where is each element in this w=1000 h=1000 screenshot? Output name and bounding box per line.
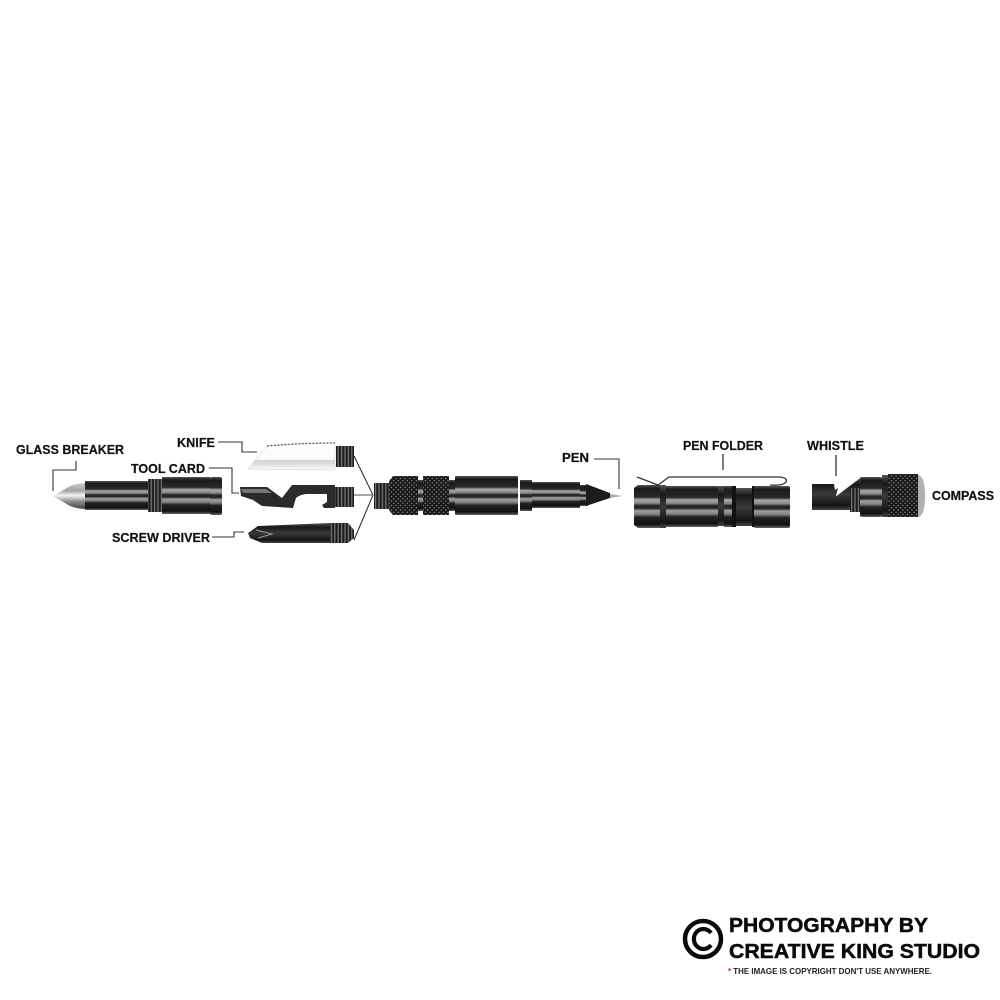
card highlight xyxy=(241,489,272,493)
threaded end xyxy=(336,446,354,467)
knurled grip xyxy=(888,474,918,517)
barrel xyxy=(634,485,660,528)
knurled grip 2 xyxy=(423,476,449,515)
barrel xyxy=(85,481,149,510)
label: screw driver: SCREW DRIVER xyxy=(112,531,210,545)
pocket clip xyxy=(637,477,786,485)
knurled grip 1 xyxy=(389,476,418,515)
label: pen xyxy=(562,451,619,489)
label: whistle xyxy=(807,439,864,476)
end collar xyxy=(210,477,222,515)
part: knife xyxy=(248,443,354,470)
label: glass breaker xyxy=(16,443,124,491)
label: compass: COMPASS xyxy=(932,489,994,503)
threaded neck xyxy=(850,488,860,512)
part: pen folder xyxy=(634,477,790,528)
label: whistle: WHISTLE xyxy=(807,439,864,453)
collar 1 xyxy=(418,480,423,511)
part: glass breaker head xyxy=(53,477,222,515)
connector lines to pen body xyxy=(354,456,373,540)
driver bit xyxy=(248,523,330,543)
whistle tube xyxy=(812,478,860,510)
blade xyxy=(248,443,335,470)
label: glass breaker: GLASS BREAKER xyxy=(16,443,124,457)
card body xyxy=(240,485,335,508)
collar 2 xyxy=(449,480,455,511)
label: knife xyxy=(177,436,257,452)
copyright notice: * THE IMAGE IS COPYRIGHT DON'T USE ANYWHERE. xyxy=(728,966,932,976)
label: tool card xyxy=(131,462,239,493)
pen tip xyxy=(610,494,622,498)
part: main pen body xyxy=(374,476,622,515)
label: tool card: TOOL CARD xyxy=(131,462,205,476)
metal cone tip xyxy=(53,483,86,509)
threaded end xyxy=(330,523,354,543)
label: pen folder xyxy=(683,439,763,470)
credit line 1: PHOTOGRAPHY BY xyxy=(729,914,928,937)
step collar xyxy=(520,480,532,511)
part: screw driver xyxy=(248,523,354,543)
front barrel xyxy=(532,482,580,508)
compass face xyxy=(918,475,925,517)
main barrel xyxy=(455,476,518,515)
grooved neck xyxy=(148,479,162,512)
whistle notch xyxy=(836,477,861,496)
label: pen folder: PEN FOLDER xyxy=(683,439,763,453)
serrated spine xyxy=(267,443,335,446)
sleeve xyxy=(162,477,210,514)
threaded end xyxy=(335,487,354,507)
label: knife: KNIFE xyxy=(177,436,215,450)
thread xyxy=(374,483,389,509)
copyright badge xyxy=(685,914,980,976)
label: pen: PEN xyxy=(562,451,589,465)
bit cross highlight xyxy=(256,530,272,538)
part: whistle and compass cap xyxy=(812,474,925,517)
icon: copyright circle xyxy=(685,921,721,957)
nose cone xyxy=(586,484,610,506)
part: tool card xyxy=(240,485,354,508)
credit line 2: CREATIVE KING STUDIO xyxy=(729,940,980,963)
front collar xyxy=(580,485,588,506)
cap body xyxy=(860,477,882,517)
